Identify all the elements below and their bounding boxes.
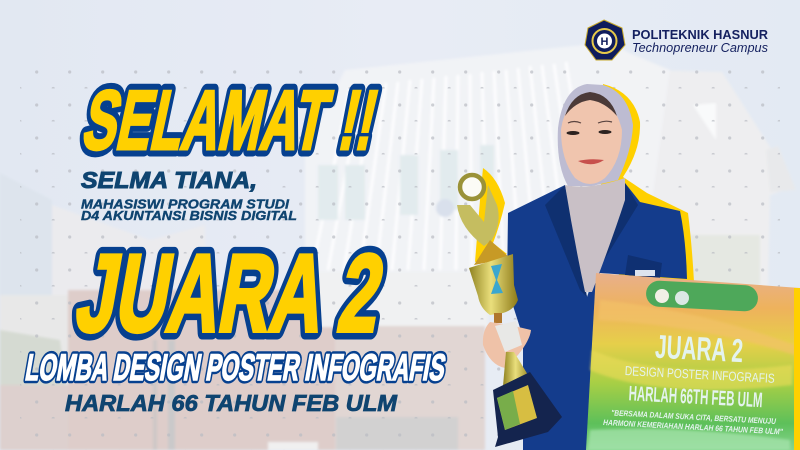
study program: D4 AKUNTANSI BISNIS DIGITAL bbox=[81, 208, 297, 223]
trophy cup bbox=[469, 254, 518, 315]
icon: campus crest: H bbox=[601, 36, 609, 48]
logo and campus name bbox=[585, 20, 768, 60]
icon: campus crest bbox=[585, 20, 625, 60]
competition name bbox=[23, 346, 449, 388]
trophy yellow outline bbox=[475, 168, 507, 262]
heading: JUARA 2: JUARA 2 bbox=[69, 233, 392, 355]
heading: SELAMAT: SELAMAT !! bbox=[76, 73, 386, 167]
study program: MAHASISWI PROGRAM STUDI bbox=[81, 196, 289, 212]
heading: JUARA 2: JUARA 2 bbox=[69, 233, 392, 355]
poster texts: JUARA 2 bbox=[654, 328, 744, 369]
competition name: LOMBA DESIGN POSTER INFOGRAFIS bbox=[23, 346, 449, 388]
pocket badge bbox=[625, 255, 662, 278]
blazer bbox=[507, 183, 687, 450]
scarf bbox=[565, 178, 625, 292]
trophy bbox=[457, 168, 562, 447]
poster texts bbox=[603, 325, 788, 436]
face bbox=[561, 94, 622, 184]
poster header badge bbox=[645, 280, 759, 312]
competition name: LOMBA DESIGN POSTER INFOGRAFIS bbox=[23, 346, 449, 388]
event name: HARLAH 66 TAHUN FEB ULM bbox=[65, 390, 398, 416]
trophy wreath bbox=[457, 185, 499, 246]
poster bbox=[586, 273, 800, 450]
trophy stem bbox=[503, 352, 531, 386]
heading: JUARA 2 bbox=[69, 233, 392, 355]
study program bbox=[81, 196, 297, 223]
hijab bbox=[558, 84, 633, 186]
recipient name: SELMA TIANA, bbox=[81, 167, 257, 193]
yellow cut-out outline bbox=[600, 84, 694, 282]
person with trophy and poster bbox=[457, 84, 800, 450]
heading: SELAMAT bbox=[76, 73, 386, 167]
heading: SELAMAT: SELAMAT !! bbox=[76, 73, 386, 167]
hand bbox=[483, 322, 531, 368]
tagline: Technopreneur Campus bbox=[632, 41, 768, 55]
eyes and mouth bbox=[566, 121, 612, 164]
campus name: POLITEKNIK HASNUR bbox=[632, 28, 768, 42]
trophy base bbox=[493, 372, 562, 447]
